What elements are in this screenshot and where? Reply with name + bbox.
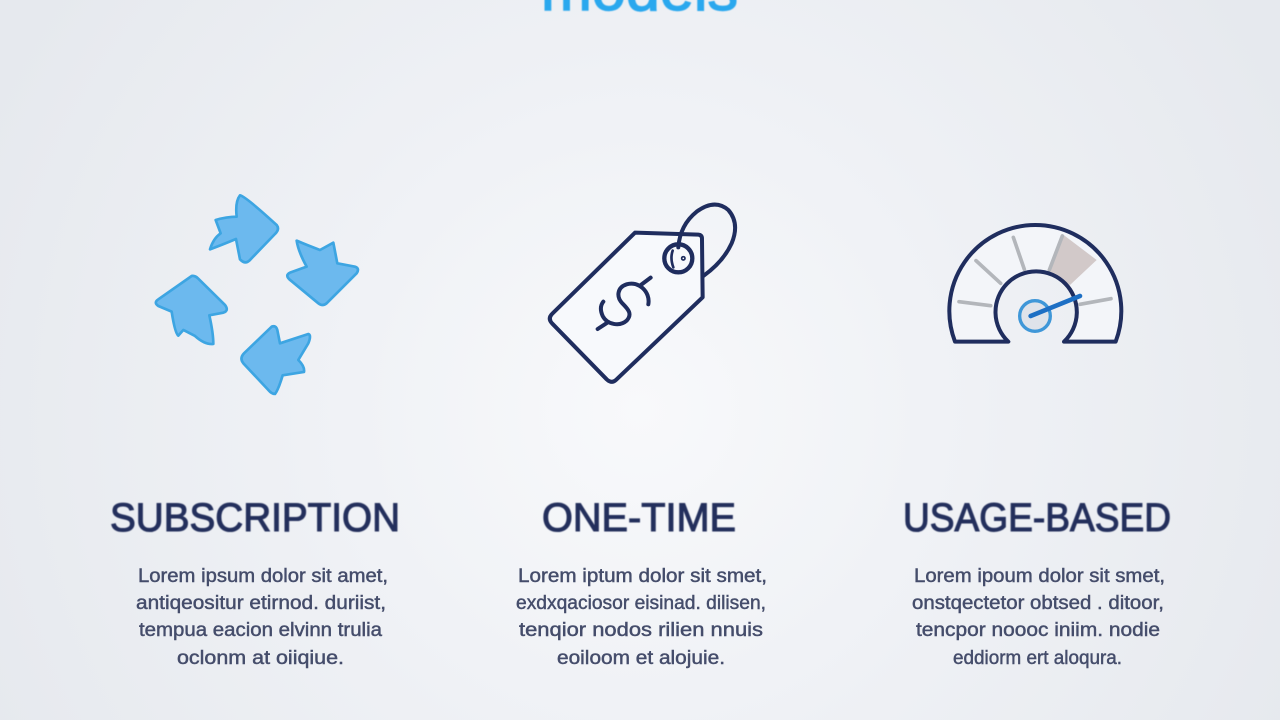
text block: usage-based bbox=[912, 566, 1165, 669]
column: one-time bbox=[516, 496, 767, 669]
text block: one-time bbox=[516, 566, 767, 669]
text block: one-time: Lorem iptum dolor sit smet, bbox=[518, 566, 767, 587]
text block: usage-based: onstqectetor obtsed . ditoor, bbox=[912, 593, 1164, 614]
icon: subscription arrows bbox=[156, 195, 358, 394]
heading: one-time: ONE-TIME bbox=[542, 496, 736, 540]
gauge needle bbox=[1031, 296, 1080, 316]
text block: subscription: antiqeositur etirnod. duriist, bbox=[136, 593, 386, 614]
highlighted wedge bbox=[1049, 234, 1097, 285]
text block: usage-based: eddiorm ert aloqura. bbox=[953, 648, 1122, 669]
text block: one-time: eoiloom et alojuie. bbox=[557, 648, 725, 669]
text block: one-time: exdxqaciosor eisinad. dilisen, bbox=[516, 593, 766, 614]
text block: usage-based: tencpor noooc iniim. nodie bbox=[916, 620, 1160, 641]
text block: subscription: oclonm at oiiqiue. bbox=[177, 648, 344, 669]
gauge ticks bbox=[959, 236, 1111, 306]
gauge hub bbox=[1020, 301, 1050, 331]
column: usage-based bbox=[903, 496, 1171, 669]
tag hole bbox=[664, 244, 692, 272]
tag string bbox=[678, 205, 735, 276]
text block: subscription: tempua eacion elvinn trulia bbox=[139, 620, 382, 641]
text block: subscription: Lorem ipsum dolor sit amet, bbox=[138, 566, 388, 587]
gauge outline bbox=[949, 225, 1121, 342]
icon: price tag bbox=[550, 205, 735, 382]
dollar sign bbox=[598, 278, 651, 329]
text block: one-time: tenqior nodos rilien nnuis bbox=[519, 620, 763, 641]
heading: subscription: SUBSCRIPTION bbox=[110, 496, 400, 540]
icon: usage gauge bbox=[949, 225, 1121, 342]
text block: usage-based: Lorem ipoum dolor sit smet, bbox=[914, 566, 1165, 587]
text block: subscription bbox=[136, 566, 388, 669]
heading: usage-based: USAGE-BASED bbox=[903, 496, 1171, 540]
column: subscription bbox=[110, 496, 400, 669]
tag body bbox=[550, 233, 703, 382]
gauge face bbox=[949, 225, 1121, 342]
